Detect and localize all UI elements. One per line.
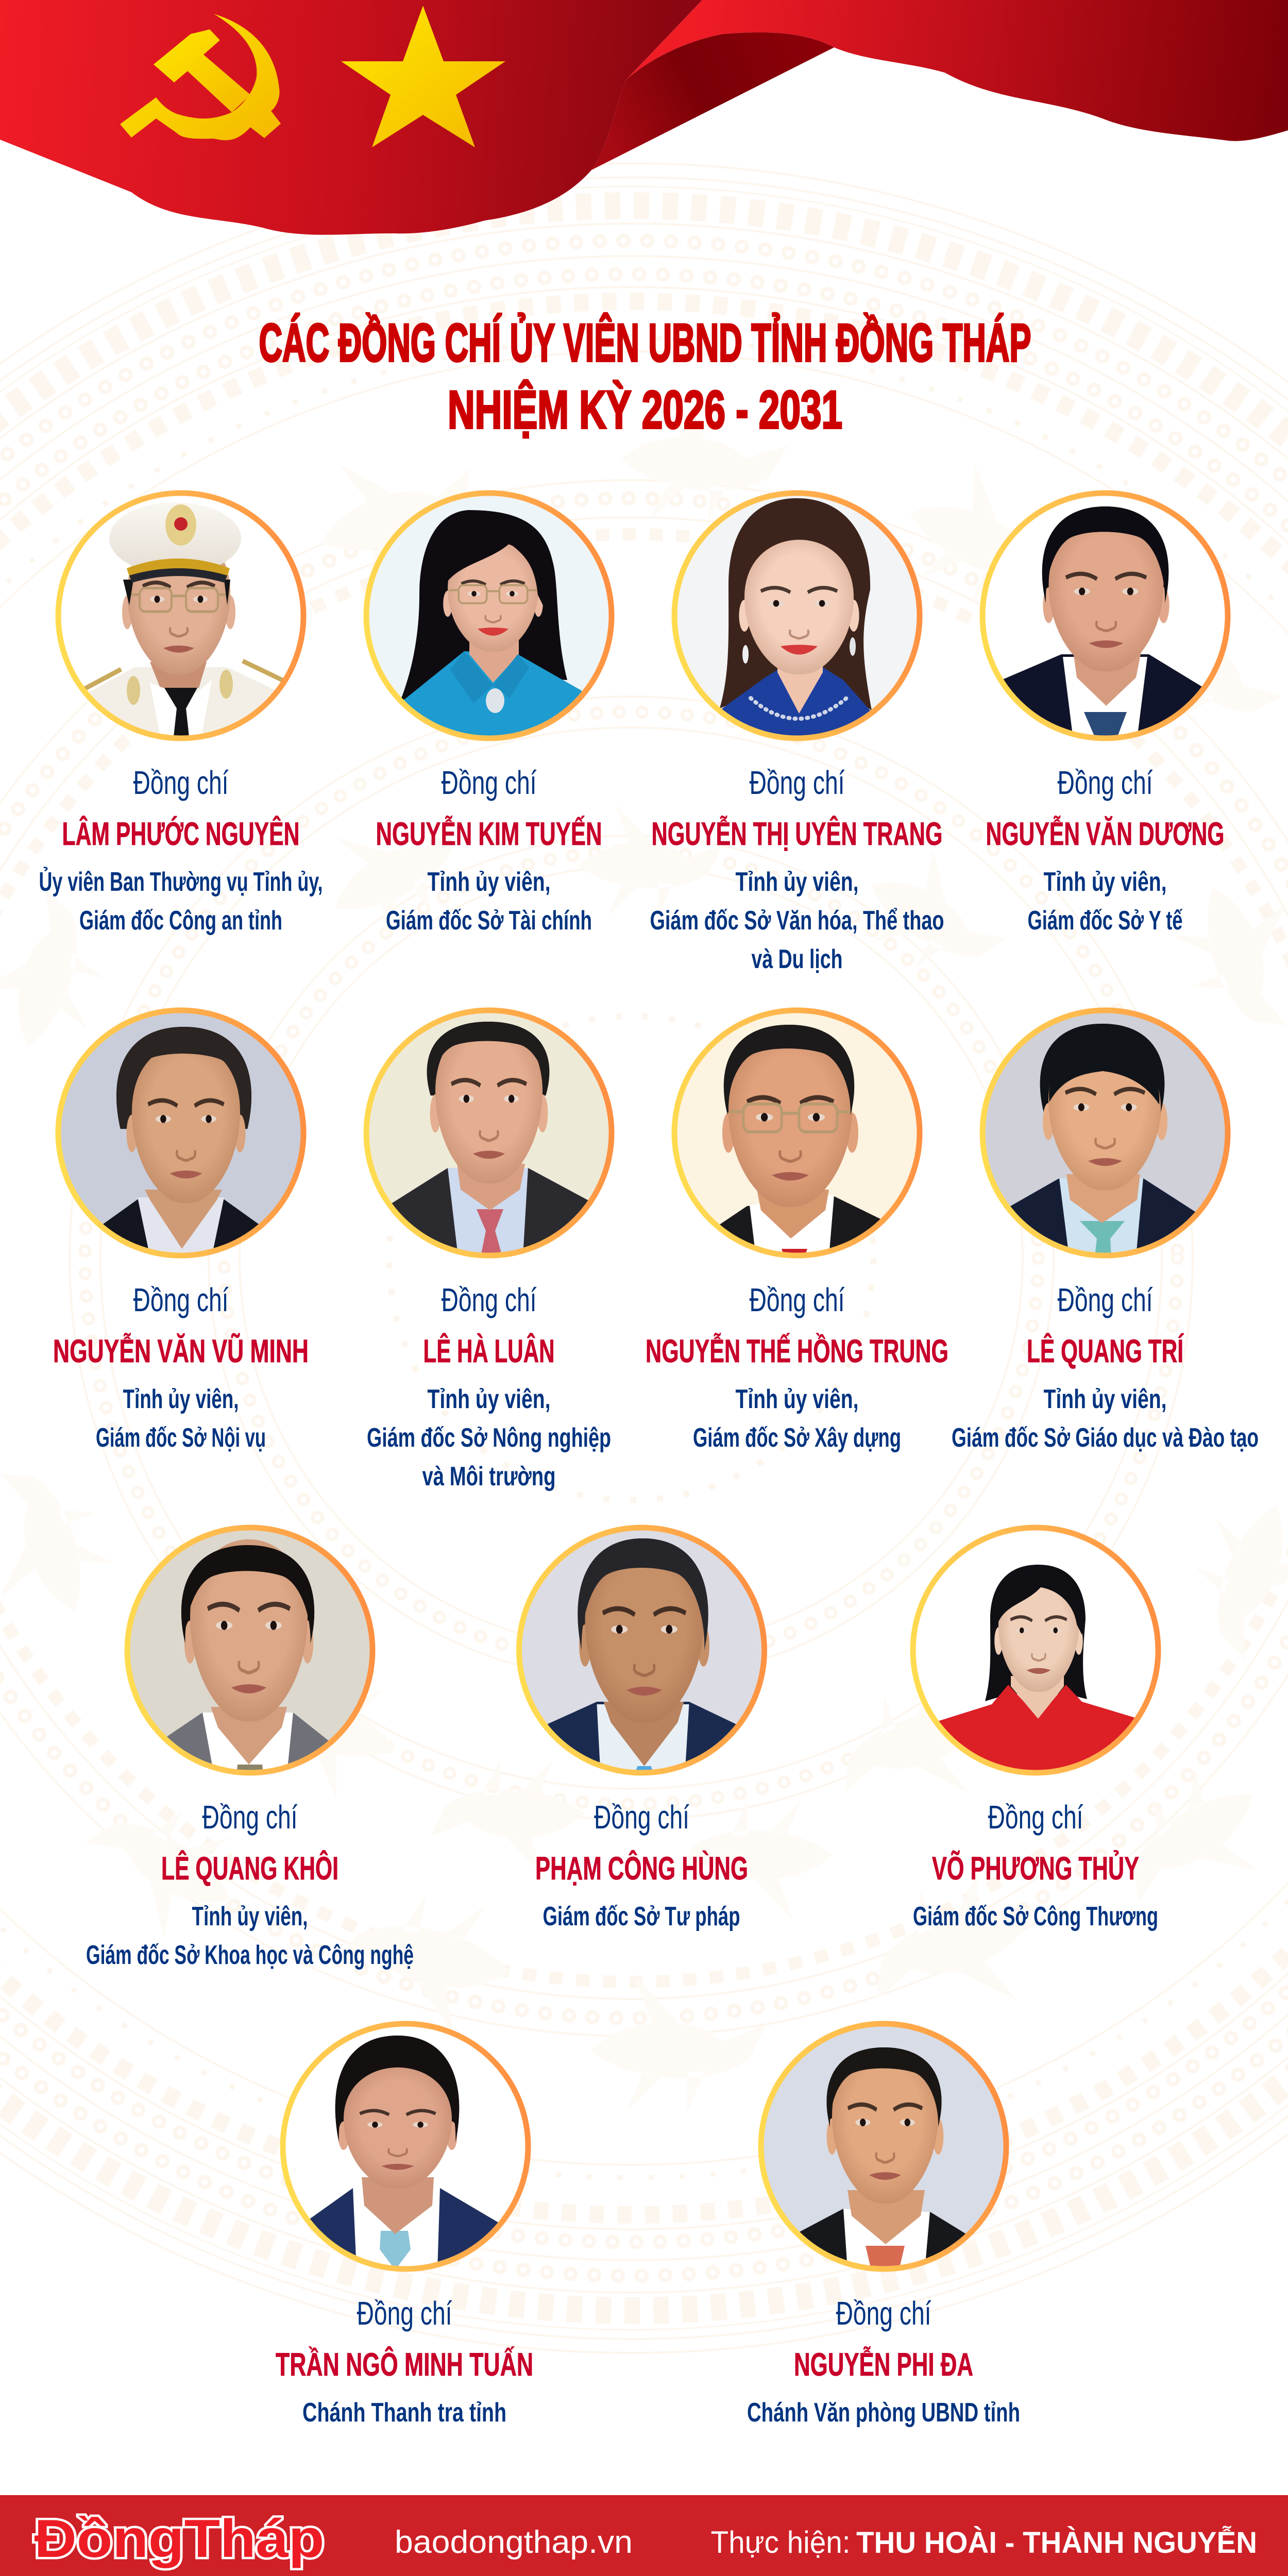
name: NGUYỄN THỊ UYÊN TRANG — [651, 816, 943, 852]
member: Lê Quang Khôi — [86, 1527, 414, 1970]
portrait: Nguyễn Thế Hồng Trung — [673, 1009, 921, 1257]
label: Đồng chí: Đồng chí — [988, 1799, 1083, 1836]
portrait: Lê Hà Luân — [365, 1009, 613, 1257]
label: Đồng chí: Đồng chí — [202, 1799, 298, 1836]
role — [86, 1902, 414, 1970]
label: Đồng chí: Đồng chí — [1057, 1281, 1153, 1318]
role: Chánh Thanh tra tỉnh — [302, 2398, 506, 2428]
role: và Du lịch — [751, 944, 843, 974]
member: Nguyễn Thị Uyên Trang — [650, 492, 944, 974]
portrait: Lê Quang Khôi — [126, 1527, 374, 1774]
role: Giám đốc Sở Công Thương — [913, 1902, 1158, 1931]
name: NGUYỄN THẾ HỒNG TRUNG — [646, 1333, 948, 1369]
role — [367, 1384, 611, 1492]
member: Trần Ngô Minh Tuấn — [276, 2023, 533, 2428]
role: Tỉnh ủy viên, — [192, 1902, 308, 1931]
role: Giám đốc Sở Y tế — [1027, 906, 1183, 936]
header flag — [0, 0, 1288, 235]
role: Giám đốc Sở Xây dựng — [693, 1423, 901, 1453]
member: Phạm Công Hùng — [518, 1527, 766, 1931]
role: Giám đốc Sở Nội vụ — [96, 1423, 266, 1453]
member: Lê Hà Luân — [365, 1009, 613, 1492]
label: Đồng chí: Đồng chí — [749, 1281, 845, 1318]
portrait: Nguyễn Văn Vũ Minh — [57, 1009, 304, 1257]
portrait: Nguyễn Văn Dương — [981, 492, 1229, 739]
footer band — [0, 2495, 1288, 2576]
portrait: Trần Ngô Minh Tuấn — [282, 2023, 529, 2270]
label: Đồng chí: Đồng chí — [594, 1799, 689, 1836]
member: Nguyễn Văn Dương — [981, 492, 1229, 936]
role: Chánh Văn phòng UBND tỉnh — [747, 2398, 1020, 2428]
logo: Đồng Tháp: ĐồngTháp — [34, 2509, 325, 2569]
name: NGUYỄN VĂN VŨ MINH — [53, 1333, 309, 1369]
icon: hammer and sickle — [120, 14, 281, 140]
portrait: Nguyễn Thị Uyên Trang — [673, 492, 921, 739]
name: PHẠM CÔNG HÙNG — [535, 1850, 748, 1887]
portrait: Võ Phương Thủy — [912, 1527, 1159, 1774]
label: Đồng chí: Đồng chí — [357, 2295, 452, 2332]
portrait: Nguyễn Phi Đa — [760, 2023, 1007, 2270]
role: Giám đốc Sở Nông nghiệp — [367, 1423, 611, 1453]
role — [650, 867, 944, 974]
role: Giám đốc Sở Tài chính — [386, 906, 592, 936]
portrait: Lê Quang Trí — [981, 1009, 1229, 1257]
label: Đồng chí: Đồng chí — [133, 1281, 229, 1318]
name: LÊ QUANG KHÔI — [161, 1850, 338, 1887]
role: Tỉnh ủy viên, — [1044, 867, 1166, 897]
name: NGUYỄN KIM TUYẾN — [376, 816, 602, 852]
role — [693, 1384, 901, 1453]
role — [39, 867, 323, 936]
name: NGUYỄN PHI ĐA — [794, 2346, 973, 2383]
member: Nguyễn Văn Vũ Minh — [53, 1009, 309, 1453]
portrait: Nguyễn Kim Tuyến — [365, 492, 613, 739]
role: Tỉnh ủy viên, — [1044, 1384, 1166, 1414]
name: LÊ QUANG TRÍ — [1027, 1333, 1184, 1369]
portrait: Lâm Phước Nguyên — [57, 492, 304, 739]
credit names: THU HOÀI - THÀNH NGUYỄN — [856, 2526, 1257, 2560]
role: Giám đốc Sở Tư pháp — [543, 1902, 740, 1931]
label: Đồng chí: Đồng chí — [441, 764, 537, 801]
member: Nguyễn Thế Hồng Trung — [646, 1009, 948, 1453]
title — [259, 313, 1031, 440]
role: Tỉnh ủy viên, — [736, 867, 858, 897]
role — [386, 867, 592, 936]
member: Lê Quang Trí — [952, 1009, 1259, 1453]
label: Đồng chí: Đồng chí — [1057, 764, 1153, 801]
member: Võ Phương Thủy — [912, 1527, 1159, 1931]
member: Nguyễn Kim Tuyến — [365, 492, 613, 936]
website: baodongthap.vn — [395, 2524, 633, 2560]
credit label: Thực hiện: — [711, 2525, 850, 2560]
name: LÂM PHƯỚC NGUYÊN — [62, 816, 300, 852]
name: TRẦN NGÔ MINH TUẤN — [276, 2346, 533, 2383]
role: Giám đốc Công an tỉnh — [79, 906, 282, 936]
portrait: Phạm Công Hùng — [518, 1527, 766, 1774]
role — [1027, 867, 1183, 936]
role: Tỉnh ủy viên, — [736, 1384, 858, 1414]
role: Tỉnh ủy viên, — [428, 867, 550, 897]
icon: gold star — [341, 6, 505, 147]
name: LÊ HÀ LUÂN — [423, 1333, 554, 1369]
title: NHIỆM KỲ 2026 - 2031 — [448, 380, 842, 440]
member: Nguyễn Phi Đa — [747, 2023, 1020, 2428]
role: Tỉnh ủy viên, — [428, 1384, 550, 1414]
role: Giám đốc Sở Văn hóa, Thể thao — [650, 906, 944, 936]
label: Đồng chí: Đồng chí — [133, 764, 229, 801]
name: VÕ PHƯƠNG THỦY — [932, 1850, 1139, 1887]
member: Lâm Phước Nguyên — [39, 492, 323, 936]
label: Đồng chí: Đồng chí — [441, 1281, 537, 1318]
role — [952, 1384, 1259, 1453]
role: Tỉnh ủy viên, — [123, 1384, 239, 1414]
role: Giám đốc Sở Khoa học và Công nghệ — [86, 1940, 414, 1970]
label: Đồng chí: Đồng chí — [836, 2295, 931, 2332]
role: Ủy viên Ban Thường vụ Tỉnh ủy, — [39, 867, 323, 897]
role: và Môi trường — [422, 1462, 555, 1492]
label: Đồng chí: Đồng chí — [749, 764, 845, 801]
role — [96, 1384, 266, 1453]
